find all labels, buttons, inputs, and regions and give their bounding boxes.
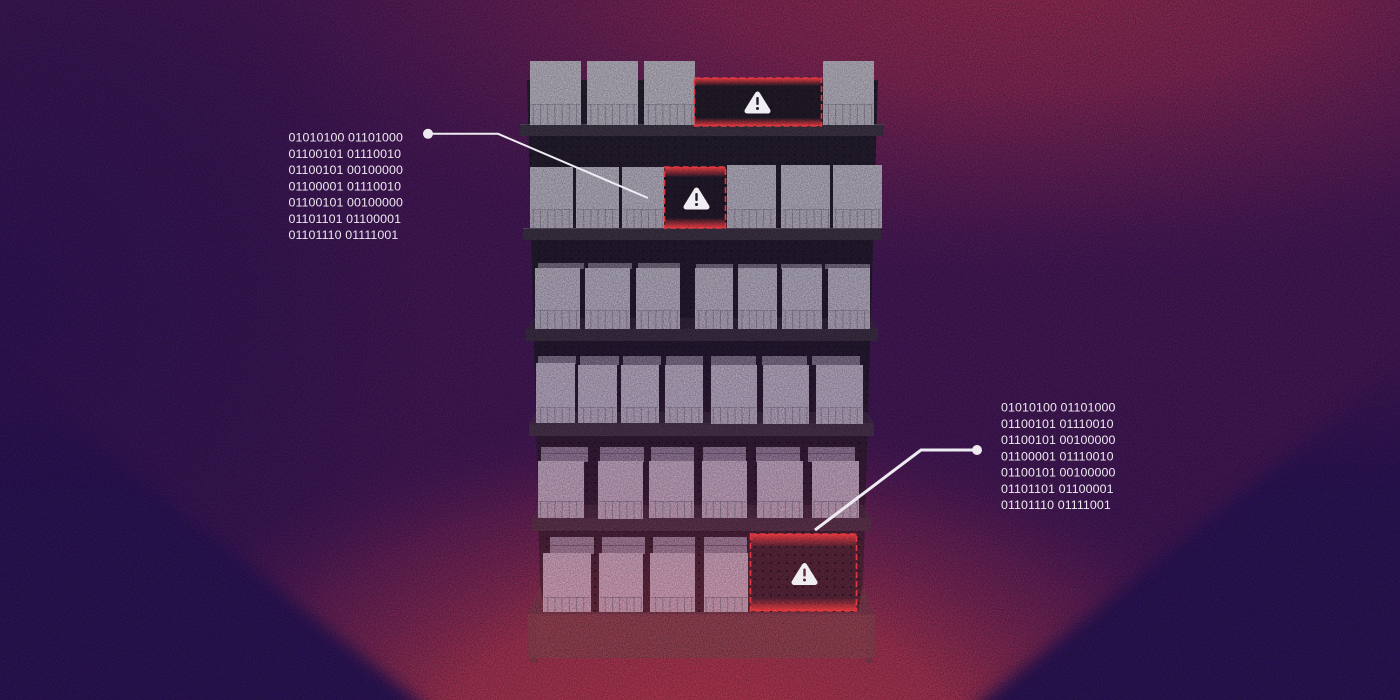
box 3-4	[695, 264, 733, 329]
shelf row 2	[523, 165, 882, 240]
box 5-1	[538, 447, 588, 518]
box 2-5	[781, 165, 830, 228]
callout: left binary text: 01101101 01100001	[288, 212, 401, 226]
box 3-2	[585, 263, 632, 329]
shelf row 4	[529, 356, 874, 436]
shelving unit	[520, 61, 884, 663]
box 5-3	[649, 447, 694, 518]
callout: left binary text: 01100101 00100000	[288, 196, 403, 210]
back panel	[527, 80, 878, 620]
icon: warning triangle	[794, 566, 815, 582]
box 4-6	[762, 356, 809, 424]
shelf row 6	[543, 537, 748, 612]
box 5-4	[702, 447, 747, 518]
box 5-5	[756, 447, 803, 518]
callout: left binary text	[288, 130, 403, 242]
callout: right binary text: 01100001 01110010	[1001, 449, 1114, 463]
base drawer	[528, 585, 875, 663]
box 6-1	[543, 537, 594, 612]
box 3-6	[781, 264, 822, 329]
callout: left binary text: 01010100 01101000	[288, 130, 403, 144]
callout: right binary text: 01010100 01101000	[1001, 400, 1115, 414]
box 6-3	[650, 537, 695, 612]
callout: left leader line	[423, 129, 648, 198]
callout: left binary text: 01101110 01111001	[288, 228, 398, 242]
callout: right binary text: 01100101 00100000	[1001, 433, 1115, 447]
callout: right binary text: 01100101 00100000	[1001, 466, 1115, 480]
box 2-6	[833, 165, 882, 228]
box 2-2	[576, 167, 619, 228]
shelf row 1	[520, 61, 884, 136]
box 3-7	[825, 264, 870, 329]
callout: right binary text	[1001, 400, 1115, 512]
box 1-3	[644, 61, 695, 125]
box 1-4	[823, 61, 874, 125]
callout: left binary text: 01100101 00100000	[288, 163, 403, 177]
box 6-4	[704, 537, 748, 612]
box 1-1	[530, 61, 581, 125]
box 2-4	[727, 165, 776, 228]
box 3-5	[738, 264, 777, 329]
box 4-3	[621, 356, 661, 423]
box 6-2	[599, 537, 645, 612]
box 4-7	[812, 356, 863, 424]
alert: missing product, second shelf	[664, 167, 726, 228]
box 3-3	[636, 263, 680, 329]
callout: left binary text: 01100001 01110010	[288, 179, 401, 193]
alert: missing product, bottom shelf	[750, 534, 856, 611]
box 4-4	[665, 356, 703, 423]
alert: missing product, top shelf	[694, 78, 822, 126]
callout: right binary text: 01100101 01110010	[1001, 417, 1114, 431]
box 4-2	[578, 356, 619, 423]
box 1-2	[587, 61, 638, 125]
icon: warning triangle	[686, 190, 707, 207]
box 3-1	[535, 263, 584, 329]
box 5-2	[598, 447, 644, 519]
callout: right binary text: 01101110 01111001	[1001, 498, 1111, 512]
icon: warning triangle	[747, 94, 768, 111]
shelf row 3	[526, 263, 878, 341]
shelf row 5	[532, 447, 871, 531]
box 4-1	[536, 356, 576, 423]
box 5-6	[808, 447, 859, 518]
box 2-1	[530, 167, 573, 228]
box 2-3	[622, 167, 664, 228]
callout: left binary text: 01100101 01110010	[288, 147, 401, 161]
callout: right binary text: 01101101 01100001	[1001, 482, 1114, 496]
callout: right leader line	[815, 445, 982, 530]
box 4-5	[711, 356, 757, 424]
